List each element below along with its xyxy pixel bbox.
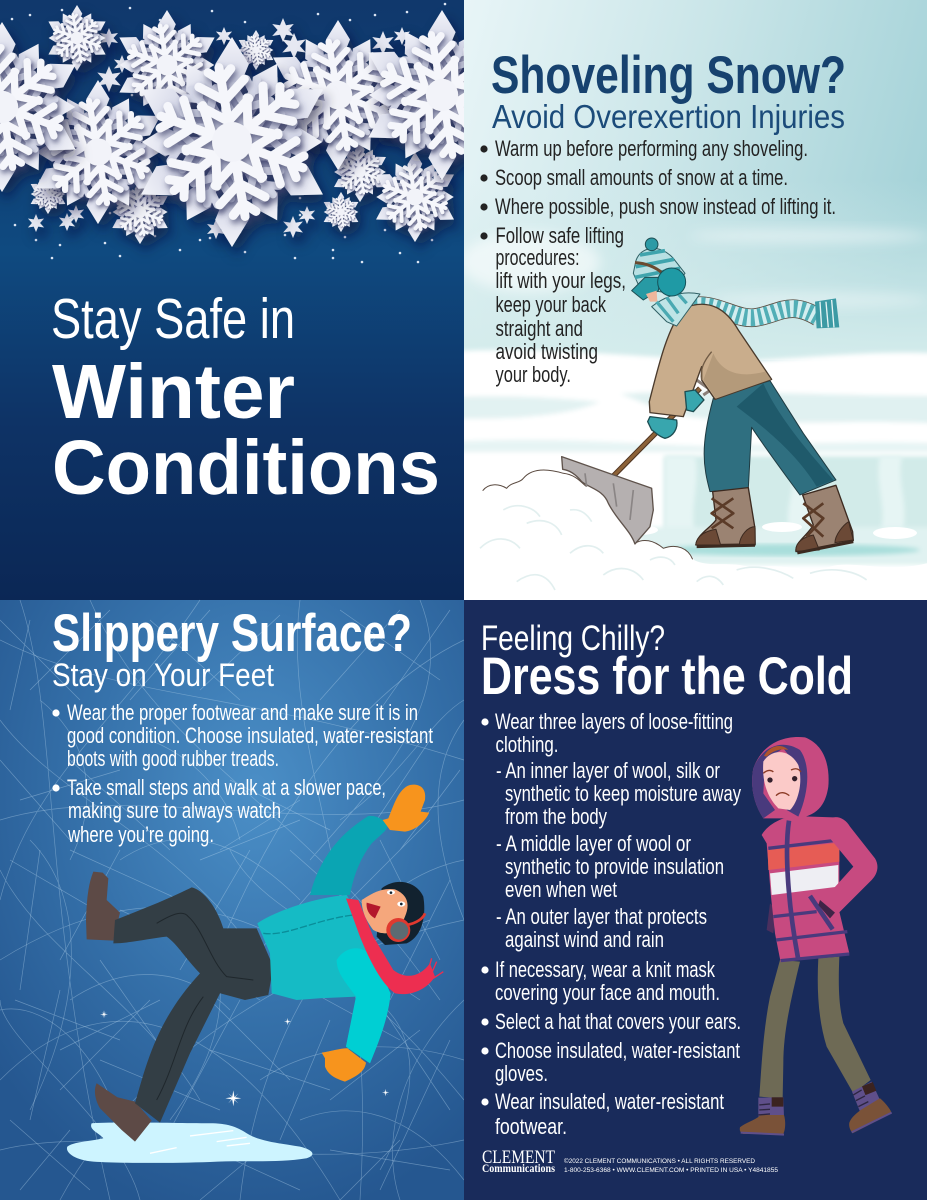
clothing tips list: covering your face and mouth. — [495, 980, 720, 1005]
clothing tips list: - An inner layer of wool, silk or — [496, 758, 720, 783]
heading: shoveling snow: Avoid Overexertion Injuries — [492, 98, 845, 135]
slippery surface tips list: boots with good rubber treads. — [67, 746, 279, 771]
illustration: person in winter coat — [740, 737, 892, 1135]
clothing tips list: Wear three layers of loose-fitting — [495, 709, 733, 734]
scarf — [346, 898, 435, 994]
goggles and face — [632, 277, 661, 300]
raised arm — [310, 816, 387, 895]
clothing tips list: gloves. — [495, 1061, 548, 1086]
hidden hand — [767, 903, 777, 933]
slippery surface tips list: making sure to always watch — [68, 798, 281, 823]
slippery surface tips list — [52, 700, 434, 847]
illustration: man shoveling snow — [464, 238, 927, 600]
footer: publisher logo and credits: ©2022 CLEMENT COMMUNICATIONS • ALL RIGHTS RESERVED — [564, 1157, 755, 1165]
title: Stay Safe in — [51, 287, 295, 351]
lower mitten — [322, 1048, 366, 1082]
shoveling tips list: Scoop small amounts of snow at a time. — [495, 165, 788, 190]
boots — [740, 1082, 892, 1135]
gloves — [648, 417, 677, 438]
shoveling tips list: Warm up before performing any shoveling. — [495, 136, 808, 161]
pants — [704, 381, 836, 495]
shoveling tips list: straight and — [496, 316, 583, 341]
heading: feeling chilly — [481, 619, 853, 706]
clothing tips list: footwear. — [495, 1114, 567, 1139]
scarf tail — [680, 298, 839, 328]
paper snowflakes — [0, 10, 522, 247]
clothing tips list: against wind and rain — [505, 927, 664, 952]
heading: shoveling snow — [491, 46, 846, 135]
footer: publisher logo and credits: CLEMENT — [482, 1148, 555, 1168]
footer: publisher logo and credits — [482, 1148, 778, 1175]
coat — [762, 816, 849, 962]
boots — [86, 872, 120, 941]
clothing tips list: Wear insulated, water-resistant — [495, 1089, 725, 1114]
pants — [113, 887, 273, 1123]
raised mitten — [383, 785, 429, 832]
heading: feeling chilly: Dress for the Cold — [481, 647, 853, 706]
shoveling tips list: your body. — [496, 362, 571, 387]
ice scratches — [0, 600, 464, 1200]
arm — [822, 817, 877, 917]
clothing tips list: synthetic to keep moisture away — [505, 781, 742, 806]
clothing tips list: If necessary, wear a knit mask — [495, 957, 716, 982]
hood — [752, 737, 829, 818]
small snowflakes — [29, 5, 388, 244]
clothing tips list: synthetic to provide insulation — [505, 854, 724, 879]
panel: dress for the cold — [464, 600, 927, 1200]
clothing tips list: even when wet — [505, 877, 618, 902]
jacket — [257, 895, 390, 1063]
heading: slippery surface — [52, 604, 412, 693]
shoveling tips list: avoid twisting — [496, 339, 598, 364]
title — [51, 287, 440, 511]
footer: publisher logo and credits: 1-800-253-6368 • WWW.CLEMENT.COM • PRINTED IN USA • Y4841855 — [564, 1167, 778, 1174]
earmuff — [658, 268, 686, 296]
heading: shoveling snow: Shoveling Snow? — [491, 46, 846, 105]
clothing tips list: Choose insulated, water-resistant — [495, 1038, 741, 1063]
clothing tips list: from the body — [505, 804, 608, 829]
head — [362, 882, 425, 945]
snowy background — [464, 211, 927, 569]
sweater — [649, 304, 772, 417]
scarf neck — [652, 293, 700, 326]
clothing tips list: clothing. — [496, 732, 558, 757]
shovel handle — [613, 388, 700, 476]
footer: publisher logo and credits: Communications — [482, 1163, 555, 1175]
snow pile — [464, 470, 927, 600]
clothing tips list: Select a hat that covers your ears. — [495, 1009, 741, 1034]
clothing tips list: - An outer layer that protects — [496, 904, 707, 929]
clothing tips list — [481, 709, 742, 1139]
boots — [696, 485, 853, 553]
shoveling tips list: keep your back — [496, 292, 607, 317]
small paper stars — [28, 18, 410, 239]
shoveling tips list: lift with your legs, — [496, 268, 626, 293]
illustration: man slipping on ice — [67, 785, 443, 1163]
slippery surface tips list: Take small steps and walk at a slower pace, — [67, 775, 386, 800]
slippery surface tips list: where you’re going. — [67, 822, 214, 847]
title: Conditions — [52, 425, 440, 511]
panel: slippery surface — [0, 600, 464, 1200]
legs — [759, 960, 800, 1098]
heading: slippery surface: Stay on Your Feet — [52, 657, 274, 693]
heading: slippery surface: Slippery Surface? — [52, 604, 412, 663]
shoveling tips list — [480, 136, 836, 387]
shoveling tips list: Follow safe lifting — [496, 223, 624, 248]
slippery surface tips list: Wear the proper footwear and make sure it is in — [67, 700, 418, 725]
panel: shoveling snow — [440, 0, 927, 610]
slippery surface tips list: good condition. Choose insulated, water-resistant — [67, 723, 434, 748]
ice sparkles — [100, 1010, 389, 1106]
puddle — [67, 1123, 312, 1163]
hat — [633, 248, 685, 293]
clothing tips list: - A middle layer of wool or — [496, 831, 691, 856]
panel: winter conditions title — [0, 0, 522, 600]
falling snow dots — [7, 4, 445, 262]
shovel blade — [562, 457, 653, 544]
title: Winter — [52, 349, 295, 435]
shoveling tips list: procedures: — [496, 245, 580, 270]
heading: feeling chilly: Feeling Chilly? — [481, 619, 665, 658]
